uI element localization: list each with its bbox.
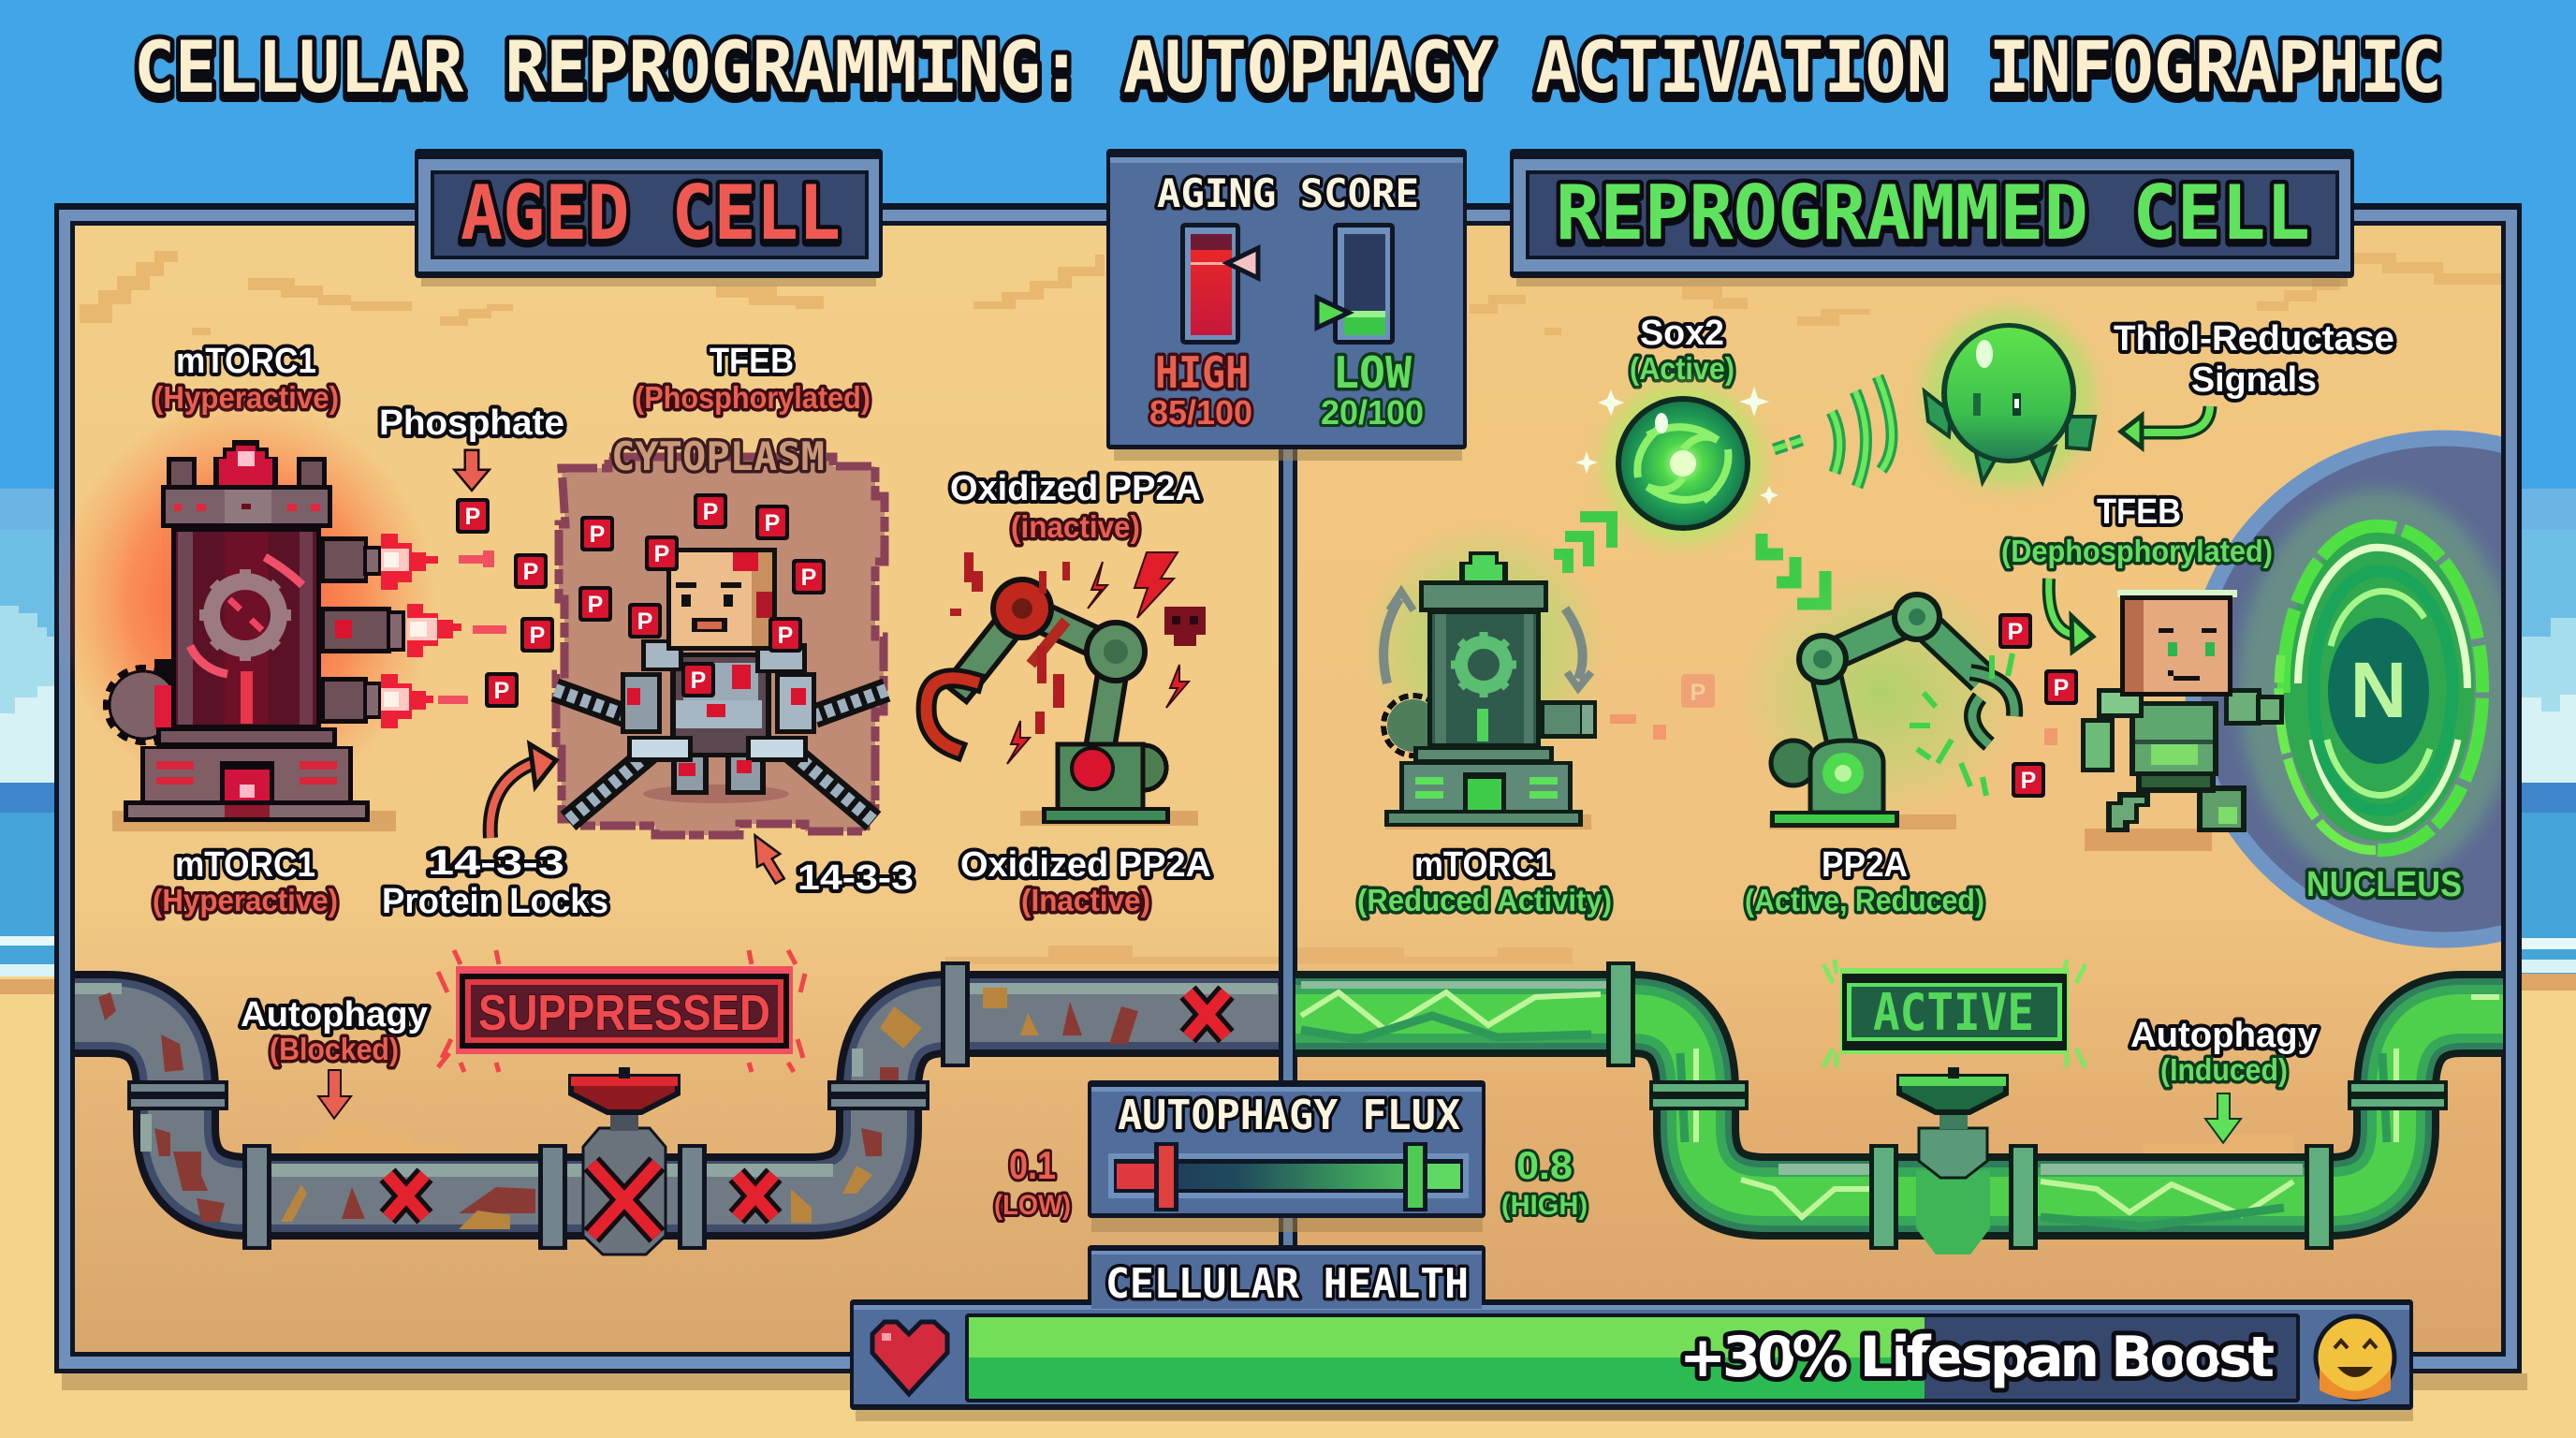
label: PP2A active reduced: PP2A xyxy=(1822,845,1908,885)
nucleus swirl xyxy=(2278,526,2482,850)
label: TFEB phosphorylated: TFEB xyxy=(710,342,794,381)
icon: smiley xyxy=(2316,1316,2394,1400)
sand dunes behind the pipes xyxy=(300,946,2293,1153)
heading: autophagy flux: AUTOPHAGY FLUX xyxy=(1118,1092,1460,1139)
aged PP2A robot arm xyxy=(927,552,1206,826)
label: mTORC1 hyperactive top: (Hyperactive) xyxy=(154,380,339,415)
label: mTORC1 hyperactive top: mTORC1 xyxy=(176,342,316,381)
icon: skull xyxy=(1164,607,1206,646)
header: aged cell xyxy=(415,149,883,286)
label: autophagy blocked: Autophagy xyxy=(241,995,428,1034)
phosphate tiles: P xyxy=(691,668,706,694)
aged mTORC1 machine xyxy=(53,398,506,831)
label: thiol-reductase signals: Signals xyxy=(2191,360,2317,400)
label: autophagy blocked xyxy=(241,995,428,1066)
gear icon xyxy=(1451,632,1516,697)
flanges xyxy=(127,961,970,1250)
value: flux high xyxy=(1501,1143,1588,1221)
title: CELLULAR REPROGRAMMING: AUTOPHAGY ACTIVATION INFOGRAPHIC xyxy=(134,25,2442,109)
heading: cellular health: CELLULAR HEALTH xyxy=(1105,1260,1469,1308)
label: sox2 active: (Active) xyxy=(1630,351,1734,386)
arrow: 14-3-3 short xyxy=(756,838,783,882)
label: autophagy induced: (Induced) xyxy=(2160,1052,2288,1087)
label: oxidized PP2A bottom: (Inactive) xyxy=(1021,883,1150,917)
sparks xyxy=(1910,653,2012,796)
debris in blocked pipe xyxy=(98,992,1138,1222)
cannon flare middle xyxy=(407,604,506,657)
label: mTORC1 hyperactive bottom: mTORC1 xyxy=(175,845,315,885)
rust debris xyxy=(950,552,1070,734)
label: PP2A active reduced xyxy=(1745,845,1984,917)
label: mTORC1 reduced activity xyxy=(1357,845,1612,917)
value: 85/100: 85/100 xyxy=(1149,393,1252,432)
label: 14-3-3 protein locks: Protein Locks xyxy=(382,882,608,921)
heading: aged cell: AGED CELL xyxy=(461,169,841,257)
cannon flare top xyxy=(381,534,494,590)
active PP2A robot arm xyxy=(1741,571,2022,829)
slider xyxy=(1108,1142,1469,1211)
label: mTORC1 reduced activity: mTORC1 xyxy=(1414,845,1553,885)
sparkles xyxy=(1575,387,1778,505)
label: PP2A active reduced: (Active, Reduced) xyxy=(1745,883,1984,917)
phosphate tiles: P xyxy=(590,521,605,548)
icon: sox2 orb xyxy=(1575,383,1778,544)
value: flux low: 0.1 xyxy=(1009,1143,1056,1187)
badge: active: ACTIVE xyxy=(1873,983,2034,1042)
panel: aging score xyxy=(1106,149,1467,461)
text: lifespan boost: +30% Lifespan Boost xyxy=(1679,1325,2275,1390)
label: autophagy induced: Autophagy xyxy=(2130,1016,2318,1055)
arrow: 14-3-3 curved xyxy=(490,744,556,838)
icon: heart xyxy=(872,1322,947,1394)
arrow: TFEB dephosphorylated xyxy=(2049,579,2093,652)
faded phosphates xyxy=(1610,674,2057,745)
arrow: phosphate down xyxy=(457,451,487,489)
cannon flare bottom xyxy=(381,674,468,728)
sand dune pattern xyxy=(80,251,2501,335)
active phosphates: P xyxy=(2008,619,2023,645)
label: autophagy induced xyxy=(2130,1016,2318,1087)
label: oxidized PP2A top: Oxidized PP2A xyxy=(950,469,1201,508)
label: mTORC1 reduced activity: (Reduced Activity) xyxy=(1357,883,1612,917)
value: 20/100: 20/100 xyxy=(1321,393,1424,432)
green valve xyxy=(1899,1067,2006,1255)
active phosphates xyxy=(1998,613,2078,798)
active phosphates: P xyxy=(2021,768,2036,794)
gauge: low aging score xyxy=(1317,223,1395,345)
phosphate tiles xyxy=(456,493,826,708)
label: 14-3-3 protein locks xyxy=(382,844,608,921)
label: nucleus: NUCLEUS xyxy=(2306,865,2462,904)
label: TFEB phosphorylated: (Phosphorylated) xyxy=(635,380,871,415)
label: 14-3-3: 14-3-3 xyxy=(798,858,914,898)
header: reprogrammed cell xyxy=(1510,149,2354,286)
nucleus xyxy=(2185,431,2501,947)
phosphate tiles: P xyxy=(703,499,718,525)
value: high: HIGH xyxy=(1155,347,1249,398)
phosphate tiles: P xyxy=(494,678,509,704)
badge: suppressed: SUPPRESSED xyxy=(478,985,770,1041)
arrow: autophagy induced xyxy=(2207,1094,2239,1141)
alert sparks xyxy=(438,950,805,1072)
phosphate tiles: P xyxy=(530,623,545,649)
phosphate tiles: P xyxy=(654,541,669,567)
label: TFEB dephosphorylated: (Dephosphorylated) xyxy=(2001,534,2273,568)
center divider xyxy=(1279,440,1297,1255)
value: flux high: 0.8 xyxy=(1516,1143,1573,1187)
panel: autophagy flux xyxy=(1088,1080,1486,1232)
flanges xyxy=(1606,961,2448,1250)
label: oxidized PP2A top xyxy=(950,469,1201,544)
label: oxidized PP2A top: (inactive) xyxy=(1011,509,1140,544)
panel shadow xyxy=(62,1373,2527,1390)
glow sparks xyxy=(1823,960,2086,1067)
nucleus letter: N xyxy=(2350,646,2407,734)
phosphate tiles: P xyxy=(523,559,538,585)
label: thiol-reductase signals xyxy=(2114,319,2394,400)
icons: red X marks xyxy=(388,992,1226,1236)
chevrons: sox2 to PP2A xyxy=(1762,534,1825,604)
gear icon in chamber xyxy=(190,557,302,674)
pipe: blocked autophagy xyxy=(75,961,1279,1250)
label: mTORC1 hyperactive bottom xyxy=(153,845,338,917)
chevrons: sox2 to mTORC1 xyxy=(1554,517,1612,573)
red valve xyxy=(571,1067,678,1255)
badge: suppressed xyxy=(438,950,805,1072)
label: TFEB phosphorylated xyxy=(635,342,871,415)
label: TFEB dephosphorylated xyxy=(2001,492,2273,568)
label: thiol-reductase signals: Thiol-Reductase xyxy=(2114,319,2394,359)
value: flux low: (LOW) xyxy=(994,1190,1071,1221)
label: oxidized PP2A bottom xyxy=(960,845,1211,917)
label: cytoplasm: CYTOPLASM xyxy=(611,433,825,479)
heading: reprogrammed cell: REPROGRAMMED CELL xyxy=(1556,169,2310,257)
label: TFEB dephosphorylated: TFEB xyxy=(2097,492,2181,532)
label: sox2 active: Sox2 xyxy=(1640,314,1724,353)
phosphate tiles: P xyxy=(465,504,480,530)
label: oxidized PP2A bottom: Oxidized PP2A xyxy=(960,845,1211,885)
label: phosphate: Phosphate xyxy=(379,404,564,443)
cytoplasm region with TFEB xyxy=(555,433,886,835)
rotation arrows xyxy=(1383,592,1591,688)
phosphate tiles: P xyxy=(588,592,603,618)
label: sox2 active xyxy=(1630,314,1734,386)
panel: cellular health xyxy=(850,1245,2413,1421)
faded phosphates: P xyxy=(1690,680,1705,706)
arrow: thiol-reductase xyxy=(2121,406,2210,448)
pipe: active autophagy xyxy=(1295,961,2503,1250)
icon: thiol-reductase blob xyxy=(1923,309,2095,487)
badge: active xyxy=(1823,960,2086,1067)
aged TFEB character xyxy=(621,548,816,795)
phosphate tiles: P xyxy=(765,510,780,536)
active phosphates: P xyxy=(2054,675,2069,701)
phosphate tiles: P xyxy=(637,609,652,635)
gauge: high aging score xyxy=(1180,223,1258,345)
phosphate tiles: P xyxy=(778,623,793,649)
signal waves xyxy=(1774,376,1892,487)
label: mTORC1 hyperactive top xyxy=(154,342,339,415)
reprogrammed TFEB character xyxy=(2081,590,2284,851)
value: flux high: (HIGH) xyxy=(1501,1190,1588,1221)
label: autophagy blocked: (Blocked) xyxy=(270,1032,399,1066)
label: mTORC1 hyperactive bottom: (Hyperactive) xyxy=(153,883,338,917)
health bar xyxy=(965,1313,2300,1402)
value: flux low xyxy=(994,1143,1071,1221)
phosphate tiles: P xyxy=(801,565,816,591)
icons: lightning bolts xyxy=(1007,552,1189,764)
heading: aging score: AGING SCORE xyxy=(1157,170,1419,216)
value: low: LOW xyxy=(1333,347,1412,398)
arrow: autophagy blocked xyxy=(320,1071,349,1117)
main panel frame xyxy=(54,203,2522,1373)
label: 14-3-3 protein locks: 14-3-3 xyxy=(428,844,564,883)
chains xyxy=(555,690,886,821)
reprogrammed mTORC1 machine xyxy=(1362,524,1605,829)
